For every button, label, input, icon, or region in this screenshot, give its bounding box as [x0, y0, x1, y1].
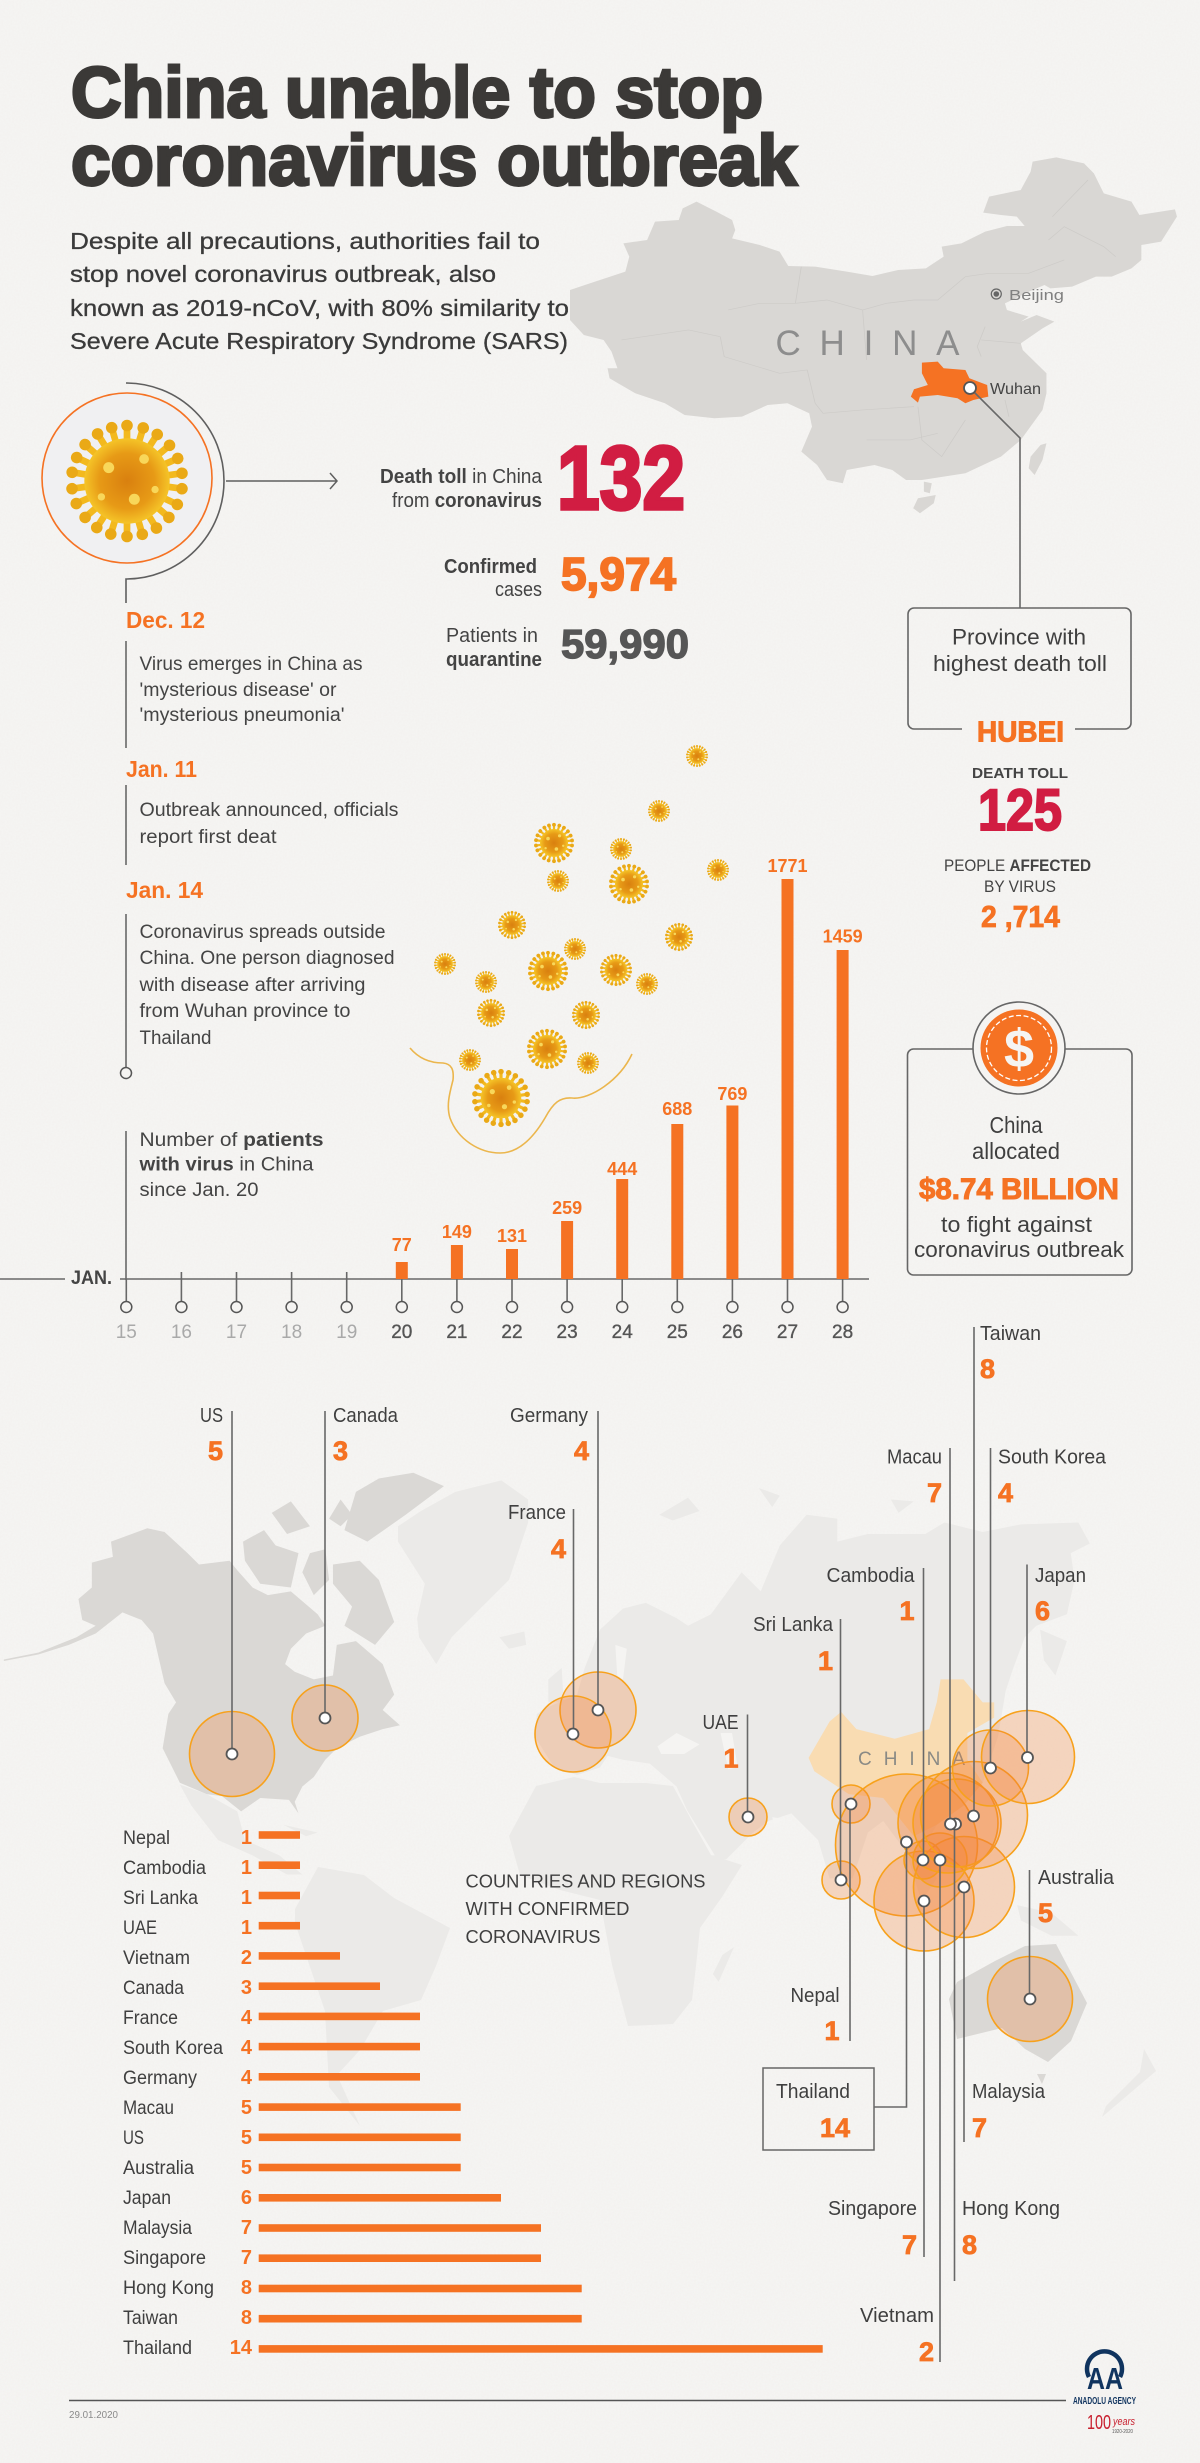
country names: Macau — [123, 2098, 174, 2119]
country values — [230, 1827, 253, 2359]
country names: Australia — [123, 2158, 194, 2179]
panel: funding — [908, 1002, 1132, 1275]
virus particles spreading — [410, 745, 729, 1153]
callout: Macau: 7 — [927, 1478, 942, 1508]
Jan. 11 entry: report first deat — [140, 827, 277, 848]
callout: US: 5 — [208, 1436, 223, 1466]
country values: 5 — [241, 2157, 252, 2179]
Dec. 12 entry: 'mysterious pneumonia' — [140, 705, 344, 726]
Jan. 14 entry: from Wuhan province to — [140, 1001, 350, 1022]
stat: quarantine: Patients in — [446, 625, 538, 647]
New Zealand — [1102, 2049, 1156, 2117]
stat: quarantine: quarantine — [446, 649, 542, 671]
country names: Sri Lanka — [123, 1888, 198, 1909]
country names: US — [123, 2128, 144, 2149]
intro text: Severe Acute Respiratory Syndrome (SARS) — [70, 328, 568, 354]
country names: Nepal — [123, 1828, 170, 1849]
panel: Hubei province: DEATH TOLL — [972, 765, 1068, 782]
Jan. 11 entry: Outbreak announced, officials — [140, 800, 398, 821]
icon: dollar coin: $ — [1004, 1019, 1034, 1079]
country values: 1 — [241, 1827, 252, 1849]
axis: 24 — [612, 1322, 633, 1343]
axis: 26 — [722, 1322, 743, 1343]
South America — [295, 1867, 450, 2126]
callout: Nepal: Nepal — [790, 1985, 840, 2007]
callout: Canada — [320, 1405, 399, 1724]
logo: Anadolu Agency — [1073, 2351, 1136, 2435]
country names: UAE — [123, 1918, 157, 1939]
country values: 8 — [241, 2307, 252, 2329]
axis — [0, 1268, 869, 1343]
callout: Taiwan: 8 — [980, 1354, 995, 1384]
callout: Hong Kong — [950, 1818, 1060, 2281]
arrow — [226, 473, 337, 489]
country values: 1 — [241, 1857, 252, 1879]
stat: quarantine — [446, 621, 689, 671]
panel: Hubei province: PEOPLE AFFECTED — [944, 857, 1091, 875]
axis: 23 — [557, 1322, 578, 1343]
daily patients chart — [0, 856, 869, 1343]
date: 29.01.2020 — [69, 2410, 118, 2421]
map caption: WITH CONFIRMED — [466, 1899, 630, 1919]
map caption: COUNTRIES AND REGIONS — [466, 1872, 706, 1892]
callout: Singapore — [828, 1896, 930, 2260]
callout: Thailand: 14 — [820, 2113, 850, 2143]
country names: Thailand — [123, 2338, 192, 2359]
Wuhan label: Wuhan — [990, 381, 1041, 398]
panel: Hubei province: 2 ,714 — [981, 899, 1061, 934]
axis: 17 — [226, 1322, 247, 1343]
country values: 14 — [230, 2337, 253, 2359]
callout: US — [200, 1405, 238, 1760]
Jan. 14 entry — [120, 877, 394, 1078]
axis: 20 — [391, 1322, 412, 1343]
map caption: CORONAVIRUS — [466, 1927, 600, 1947]
stat: death toll: Death toll in China — [380, 466, 543, 488]
logo: Anadolu Agency: 1920-2020 — [1112, 2429, 1133, 2435]
stat: confirmed cases — [444, 548, 676, 601]
Jan. 14 entry: China. One person diagnosed — [140, 948, 394, 969]
stat: death toll: from coronavirus — [392, 490, 542, 512]
timeline — [120, 607, 398, 1078]
callout: Australia — [1024, 1867, 1115, 2004]
panel: funding: $8.74 BILLION — [919, 1173, 1119, 1206]
title: coronavirus outbreak — [71, 122, 798, 201]
callout: Taiwan: Taiwan — [980, 1323, 1041, 1345]
stat: quarantine: 59,990 — [561, 621, 689, 667]
callout: Sri Lanka: 1 — [818, 1646, 833, 1676]
title — [71, 54, 798, 201]
bars: 259 — [552, 1198, 582, 1218]
North America — [4, 1473, 444, 1813]
country names: Singapore — [123, 2248, 206, 2269]
callout: Hong Kong: 8 — [962, 2230, 977, 2260]
stat: confirmed cases: 5,974 — [561, 548, 676, 600]
axis: JAN. — [71, 1268, 112, 1289]
callout: Singapore: 7 — [902, 2230, 917, 2260]
bubble overlay — [190, 1672, 1074, 2042]
country names: Taiwan — [123, 2308, 178, 2329]
bars: 131 — [497, 1226, 527, 1246]
callout: France: France — [508, 1502, 566, 1524]
axis: 27 — [777, 1322, 798, 1343]
logo: Anadolu Agency: ANADOLU AGENCY — [1073, 2396, 1136, 2407]
icon: dollar coin — [973, 1002, 1065, 1094]
panel: Hubei province: Province with — [952, 624, 1086, 650]
stat: confirmed cases: cases — [495, 579, 542, 601]
callout: Cambodia: 1 — [899, 1596, 914, 1626]
callout: Japan: Japan — [1035, 1565, 1086, 1587]
country values: 2 — [241, 1947, 252, 1969]
callout: Germany: Germany — [510, 1405, 588, 1427]
Hubei province — [911, 362, 988, 403]
country values: 3 — [241, 1977, 252, 1999]
callout: Cambodia: Cambodia — [826, 1565, 915, 1587]
country values: 7 — [241, 2247, 252, 2269]
Australia — [949, 1944, 1087, 2084]
country names: Malaysia — [123, 2218, 192, 2239]
logo: Anadolu Agency: AA — [1087, 2361, 1123, 2396]
chart caption — [126, 1130, 324, 1280]
country values: 5 — [241, 2097, 252, 2119]
callout: Japan: 6 — [1035, 1596, 1050, 1626]
intro text: Despite all precautions, authorities fail to — [70, 228, 540, 254]
map callouts — [200, 1323, 1115, 2367]
stat: death toll — [380, 429, 685, 529]
country bars — [259, 1831, 823, 2353]
country names: France — [123, 2008, 178, 2029]
bars: 444 — [607, 1159, 637, 1179]
panel: Hubei province — [908, 608, 1131, 934]
bar chart: cases by country — [123, 1827, 823, 2359]
callout: Vietnam: 2 — [919, 2337, 934, 2367]
callout: Malaysia: 7 — [972, 2113, 987, 2143]
country names: Germany — [123, 2068, 197, 2089]
logo: Anadolu Agency: years — [1112, 2416, 1135, 2428]
axis: 16 — [171, 1322, 192, 1343]
callout: Malaysia — [958, 1882, 1046, 2143]
callout: France: 4 — [551, 1534, 566, 1564]
country values: 4 — [241, 2037, 253, 2059]
Jan. 11 entry: Jan. 11 — [126, 756, 197, 782]
callout: Cambodia — [826, 1565, 928, 1866]
title: China unable to stop — [71, 54, 763, 133]
callout: Germany: 4 — [574, 1436, 589, 1466]
chart caption: Number of patients — [140, 1130, 324, 1151]
Africa — [509, 1777, 742, 2026]
callout: Vietnam: Vietnam — [860, 2305, 934, 2327]
callout: US: US — [200, 1405, 223, 1427]
intro text: stop novel coronavirus outbreak, also — [70, 261, 496, 287]
callout: South Korea: South Korea — [998, 1446, 1107, 1468]
callout: Vietnam — [860, 1854, 946, 2367]
callout: Nepal — [790, 1798, 856, 2046]
axis: 28 — [832, 1322, 853, 1343]
Wuhan marker — [964, 382, 976, 394]
callout: Thailand — [763, 1836, 912, 2150]
callout: Macau — [887, 1446, 956, 1830]
China highlight — [809, 1679, 994, 1836]
map caption — [466, 1872, 706, 1947]
Wuhan connector — [970, 388, 1020, 608]
Jan. 14 entry: Coronavirus spreads outside — [140, 922, 386, 943]
logo: Anadolu Agency: 100 — [1087, 2412, 1111, 2434]
callout: Canada: Canada — [333, 1405, 399, 1427]
axis: 22 — [501, 1322, 523, 1343]
Jan. 14 entry: Thailand — [140, 1028, 212, 1049]
intro text: known as 2019-nCoV, with 80% similarity to — [70, 295, 569, 321]
country names: Hong Kong — [123, 2278, 214, 2299]
Eurasia — [535, 1515, 1090, 1901]
country values: 8 — [241, 2277, 252, 2299]
panel: Hubei province: BY VIRUS — [984, 878, 1056, 896]
virus badge — [42, 383, 224, 603]
callout: Sri Lanka — [753, 1614, 846, 1886]
country values: 7 — [241, 2217, 252, 2239]
Beijing marker — [991, 287, 1064, 304]
panel: funding: China — [990, 1112, 1043, 1138]
country names: Vietnam — [123, 1948, 190, 1969]
callout: Japan — [1022, 1564, 1086, 1763]
callout: Malaysia: Malaysia — [972, 2081, 1046, 2103]
Jan. 14 entry: Jan. 14 — [126, 877, 203, 903]
axis: 15 — [116, 1322, 137, 1343]
bars: 77 — [392, 1235, 412, 1255]
callout: South Korea — [985, 1446, 1107, 1774]
country names: South Korea — [123, 2038, 223, 2059]
callout: Macau: Macau — [887, 1446, 942, 1468]
chart caption: with virus in China — [138, 1154, 314, 1176]
callout: Taiwan — [968, 1323, 1041, 1822]
stat: death toll: 132 — [557, 429, 685, 529]
callout: Australia: Australia — [1038, 1867, 1115, 1889]
callout: Nepal: 1 — [824, 2016, 840, 2046]
inland seas — [615, 1645, 784, 1855]
callout: Thailand: Thailand — [776, 2081, 850, 2103]
China label: CHINA — [776, 324, 960, 363]
callout: UAE: UAE — [702, 1712, 738, 1734]
Greenland and Iceland — [398, 1480, 528, 1664]
panel: funding: to fight against — [941, 1212, 1092, 1237]
bars: 769 — [717, 1084, 747, 1104]
bars: 688 — [662, 1099, 692, 1119]
chart caption: since Jan. 20 — [140, 1180, 258, 1201]
bars: 149 — [442, 1222, 472, 1242]
Dec. 12 entry: 'mysterious disease' or — [140, 680, 337, 701]
country values: 4 — [241, 2067, 253, 2089]
China outline — [570, 157, 1177, 513]
callout: Australia: 5 — [1038, 1898, 1053, 1928]
axis: 21 — [446, 1322, 467, 1343]
country values: 1 — [241, 1887, 252, 1909]
intro text — [70, 228, 569, 354]
callout: Canada: 3 — [333, 1436, 348, 1466]
map: world — [4, 1473, 1156, 2126]
Madagascar — [713, 1947, 734, 1982]
footer — [69, 2351, 1136, 2435]
callout: Sri Lanka: Sri Lanka — [753, 1614, 834, 1636]
Dec. 12 entry — [126, 607, 362, 748]
country values: 5 — [241, 2127, 252, 2149]
Dec. 12 entry: Dec. 12 — [126, 607, 205, 633]
axis: 25 — [667, 1322, 688, 1343]
country names — [123, 1828, 223, 2359]
bars: 1771 — [767, 856, 808, 876]
callout: UAE — [702, 1712, 754, 1822]
callout: South Korea: 4 — [998, 1478, 1013, 1508]
arctic and small islands — [548, 1488, 1078, 1936]
country values: 4 — [241, 2007, 253, 2029]
axis: 18 — [281, 1322, 302, 1343]
bars: 1459 — [823, 926, 863, 946]
panel: Hubei province: highest death toll — [933, 651, 1107, 676]
stat: confirmed cases: Confirmed — [444, 556, 537, 578]
callout: Hong Kong: Hong Kong — [962, 2198, 1060, 2220]
bars — [392, 856, 863, 1279]
country names: Japan — [123, 2188, 171, 2209]
map: China with Hubei highlighted — [570, 157, 1177, 608]
callout: Singapore: Singapore — [828, 2198, 917, 2220]
Jan. 14 entry: with disease after arriving — [138, 975, 366, 996]
China label: CHINA — [858, 1749, 965, 1770]
panel: Hubei province: HUBEI — [977, 716, 1064, 748]
Beijing marker: Beijing — [1009, 287, 1064, 304]
axis: 19 — [336, 1322, 357, 1343]
Mexico and Central America — [180, 1785, 318, 1875]
panel: funding: coronavirus outbreak — [914, 1237, 1125, 1262]
callout: France — [508, 1502, 578, 1740]
country names: Cambodia — [123, 1858, 206, 1879]
country names: Canada — [123, 1978, 184, 1999]
panel: funding: allocated — [972, 1138, 1060, 1164]
callout: UAE: 1 — [723, 1744, 738, 1774]
callout: Germany — [510, 1405, 604, 1716]
country values: 6 — [241, 2187, 252, 2209]
Jan. 11 entry — [126, 756, 398, 865]
country values: 1 — [241, 1917, 252, 1939]
panel: Hubei province: 125 — [978, 778, 1062, 843]
Dec. 12 entry: Virus emerges in China as — [140, 654, 362, 675]
